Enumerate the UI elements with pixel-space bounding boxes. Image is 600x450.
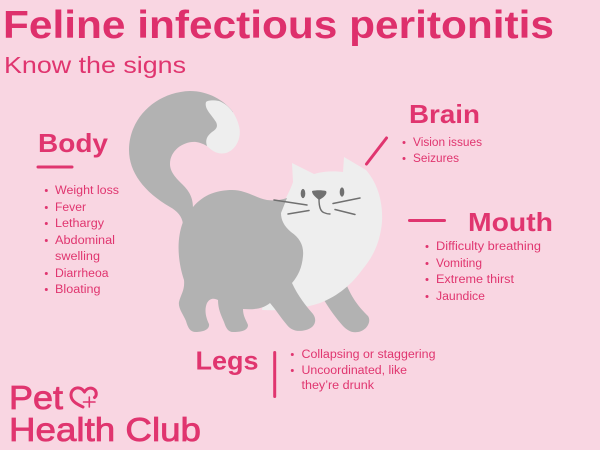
illustration: cat: [129, 91, 382, 332]
panel: mouth: [408, 207, 553, 303]
logo word: Health Club: Health Club: [9, 411, 201, 448]
panel: body: [36, 128, 119, 296]
brain heading: Brain: [409, 99, 480, 129]
mouth connector line: [408, 219, 446, 222]
white head and chest: [262, 157, 382, 310]
legs symptom list: Collapsing or staggering: [302, 349, 436, 361]
body symptom list: swelling: [55, 251, 100, 263]
legs heading: Legs: [196, 346, 258, 376]
brain symptom list: [402, 137, 482, 165]
legs symptom list: [291, 349, 436, 392]
title: Feline infectious peritonitis: [3, 4, 554, 47]
far leg: [324, 286, 369, 332]
mouth symptom list: Vomiting: [436, 258, 482, 270]
legs symptom list: Uncoordinated, like: [302, 365, 407, 377]
brain symptom list: Seizures: [413, 153, 459, 165]
body connector line: [36, 166, 74, 168]
panel: brain: [366, 99, 482, 165]
logo: Pet Health Club: [9, 379, 201, 448]
cat nose and mouth: [312, 190, 326, 200]
body symptom list: Weight loss: [55, 185, 119, 197]
mouth symptom list: Difficulty breathing: [436, 241, 541, 253]
body heading: Body: [38, 128, 109, 158]
body symptom list: Diarrheoa: [55, 268, 109, 280]
body symptom list: Fever: [55, 202, 86, 214]
grey body and legs: [179, 190, 315, 332]
body symptom list: Lethargy: [55, 218, 104, 230]
cat whiskers: [274, 198, 360, 214]
legs symptom list: they’re drunk: [302, 380, 374, 392]
panel: legs: [196, 346, 436, 398]
mouth symptom list: Extreme thirst: [436, 274, 515, 286]
tail: [129, 91, 233, 224]
legs connector line: [273, 351, 276, 398]
icon: heart with plus: [71, 388, 96, 407]
body symptom list: [45, 185, 119, 296]
cat eyes: [301, 189, 305, 198]
mouth heading: Mouth: [468, 207, 553, 237]
body symptom list: Abdominal: [55, 235, 115, 247]
mouth symptom list: [426, 241, 541, 303]
tail tip: [206, 100, 240, 154]
body symptom list: Bloating: [55, 284, 100, 296]
brain connector line: [366, 138, 386, 164]
mouth symptom list: Jaundice: [436, 291, 485, 303]
subtitle: Know the signs: [4, 52, 186, 78]
logo word: Pet: Pet: [9, 379, 63, 416]
brain symptom list: Vision issues: [413, 137, 482, 149]
